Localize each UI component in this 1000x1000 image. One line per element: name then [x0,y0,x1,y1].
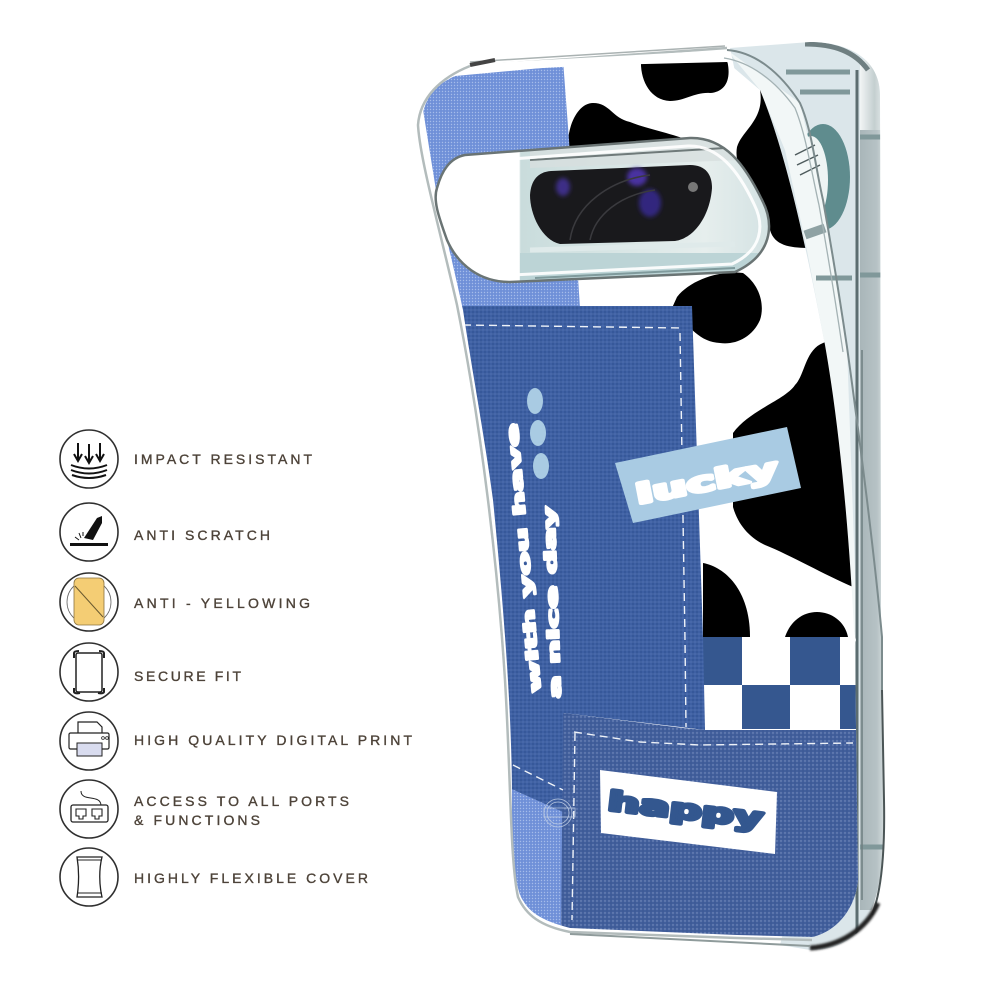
label: HIGH QUALITY DIGITAL PRINT [134,732,412,748]
bottom denim pocket [561,713,865,945]
icon: bent cover [60,848,118,906]
feature: ports and functions [60,780,349,838]
cow spots [568,60,860,637]
icon: yellow case crossed [60,573,118,631]
band between print and rim [731,53,856,660]
slogan text: with you have [502,422,545,693]
lucky label: lucky [633,453,781,511]
happy label: happy [606,786,765,835]
label [134,793,349,828]
top edge [805,44,868,70]
camera bumper [436,135,775,290]
happy label [600,770,777,854]
feature: anti scratch [60,503,270,561]
slogan text: a nice day [539,505,565,699]
feature: secure fit [60,643,241,701]
bumper rim [436,138,769,282]
feature: digital print [60,712,412,770]
main dark denim panel [455,306,705,812]
cow print background [734,68,858,937]
label: ANTI SCRATCH [134,527,270,543]
feature: flexible cover [60,848,368,906]
icon: printer [60,712,118,770]
phone body behind clear case [730,42,884,950]
dark bottom corner [810,903,878,948]
brand stamp [544,799,575,827]
printed case back [423,62,858,937]
icon: phone with corner bumpers [60,643,118,701]
label: IMPACT RESISTANT [134,451,312,467]
dark vertical lines [856,70,858,950]
stitching [463,325,853,920]
feature: impact resistant [60,430,312,488]
label: ACCESS TO ALL PORTS [134,793,349,809]
slogan text [508,422,562,699]
checkerboard [703,637,860,729]
lucky label [615,427,801,523]
label: ANTI - YELLOWING [134,595,310,611]
feature list [60,430,412,906]
feature: anti yellowing [60,573,310,631]
light denim bottom [512,788,562,926]
camera ring [807,124,850,229]
icon: ports [60,780,118,838]
label: SECURE FIT [134,668,241,684]
camera lens [530,165,712,244]
phone mockup [410,40,890,960]
inner rim double line [727,50,882,690]
label: & FUNCTIONS [134,812,260,828]
icon: blade scratching surface [60,503,118,561]
clear case rim [418,46,884,948]
icon: impact arrows [60,430,118,488]
label: HIGHLY FLEXIBLE COVER [134,870,368,886]
side strip [860,60,880,130]
cross bands [786,72,884,847]
light denim top [415,60,580,308]
three blue dots [527,388,549,479]
outer dark edge [872,690,884,915]
